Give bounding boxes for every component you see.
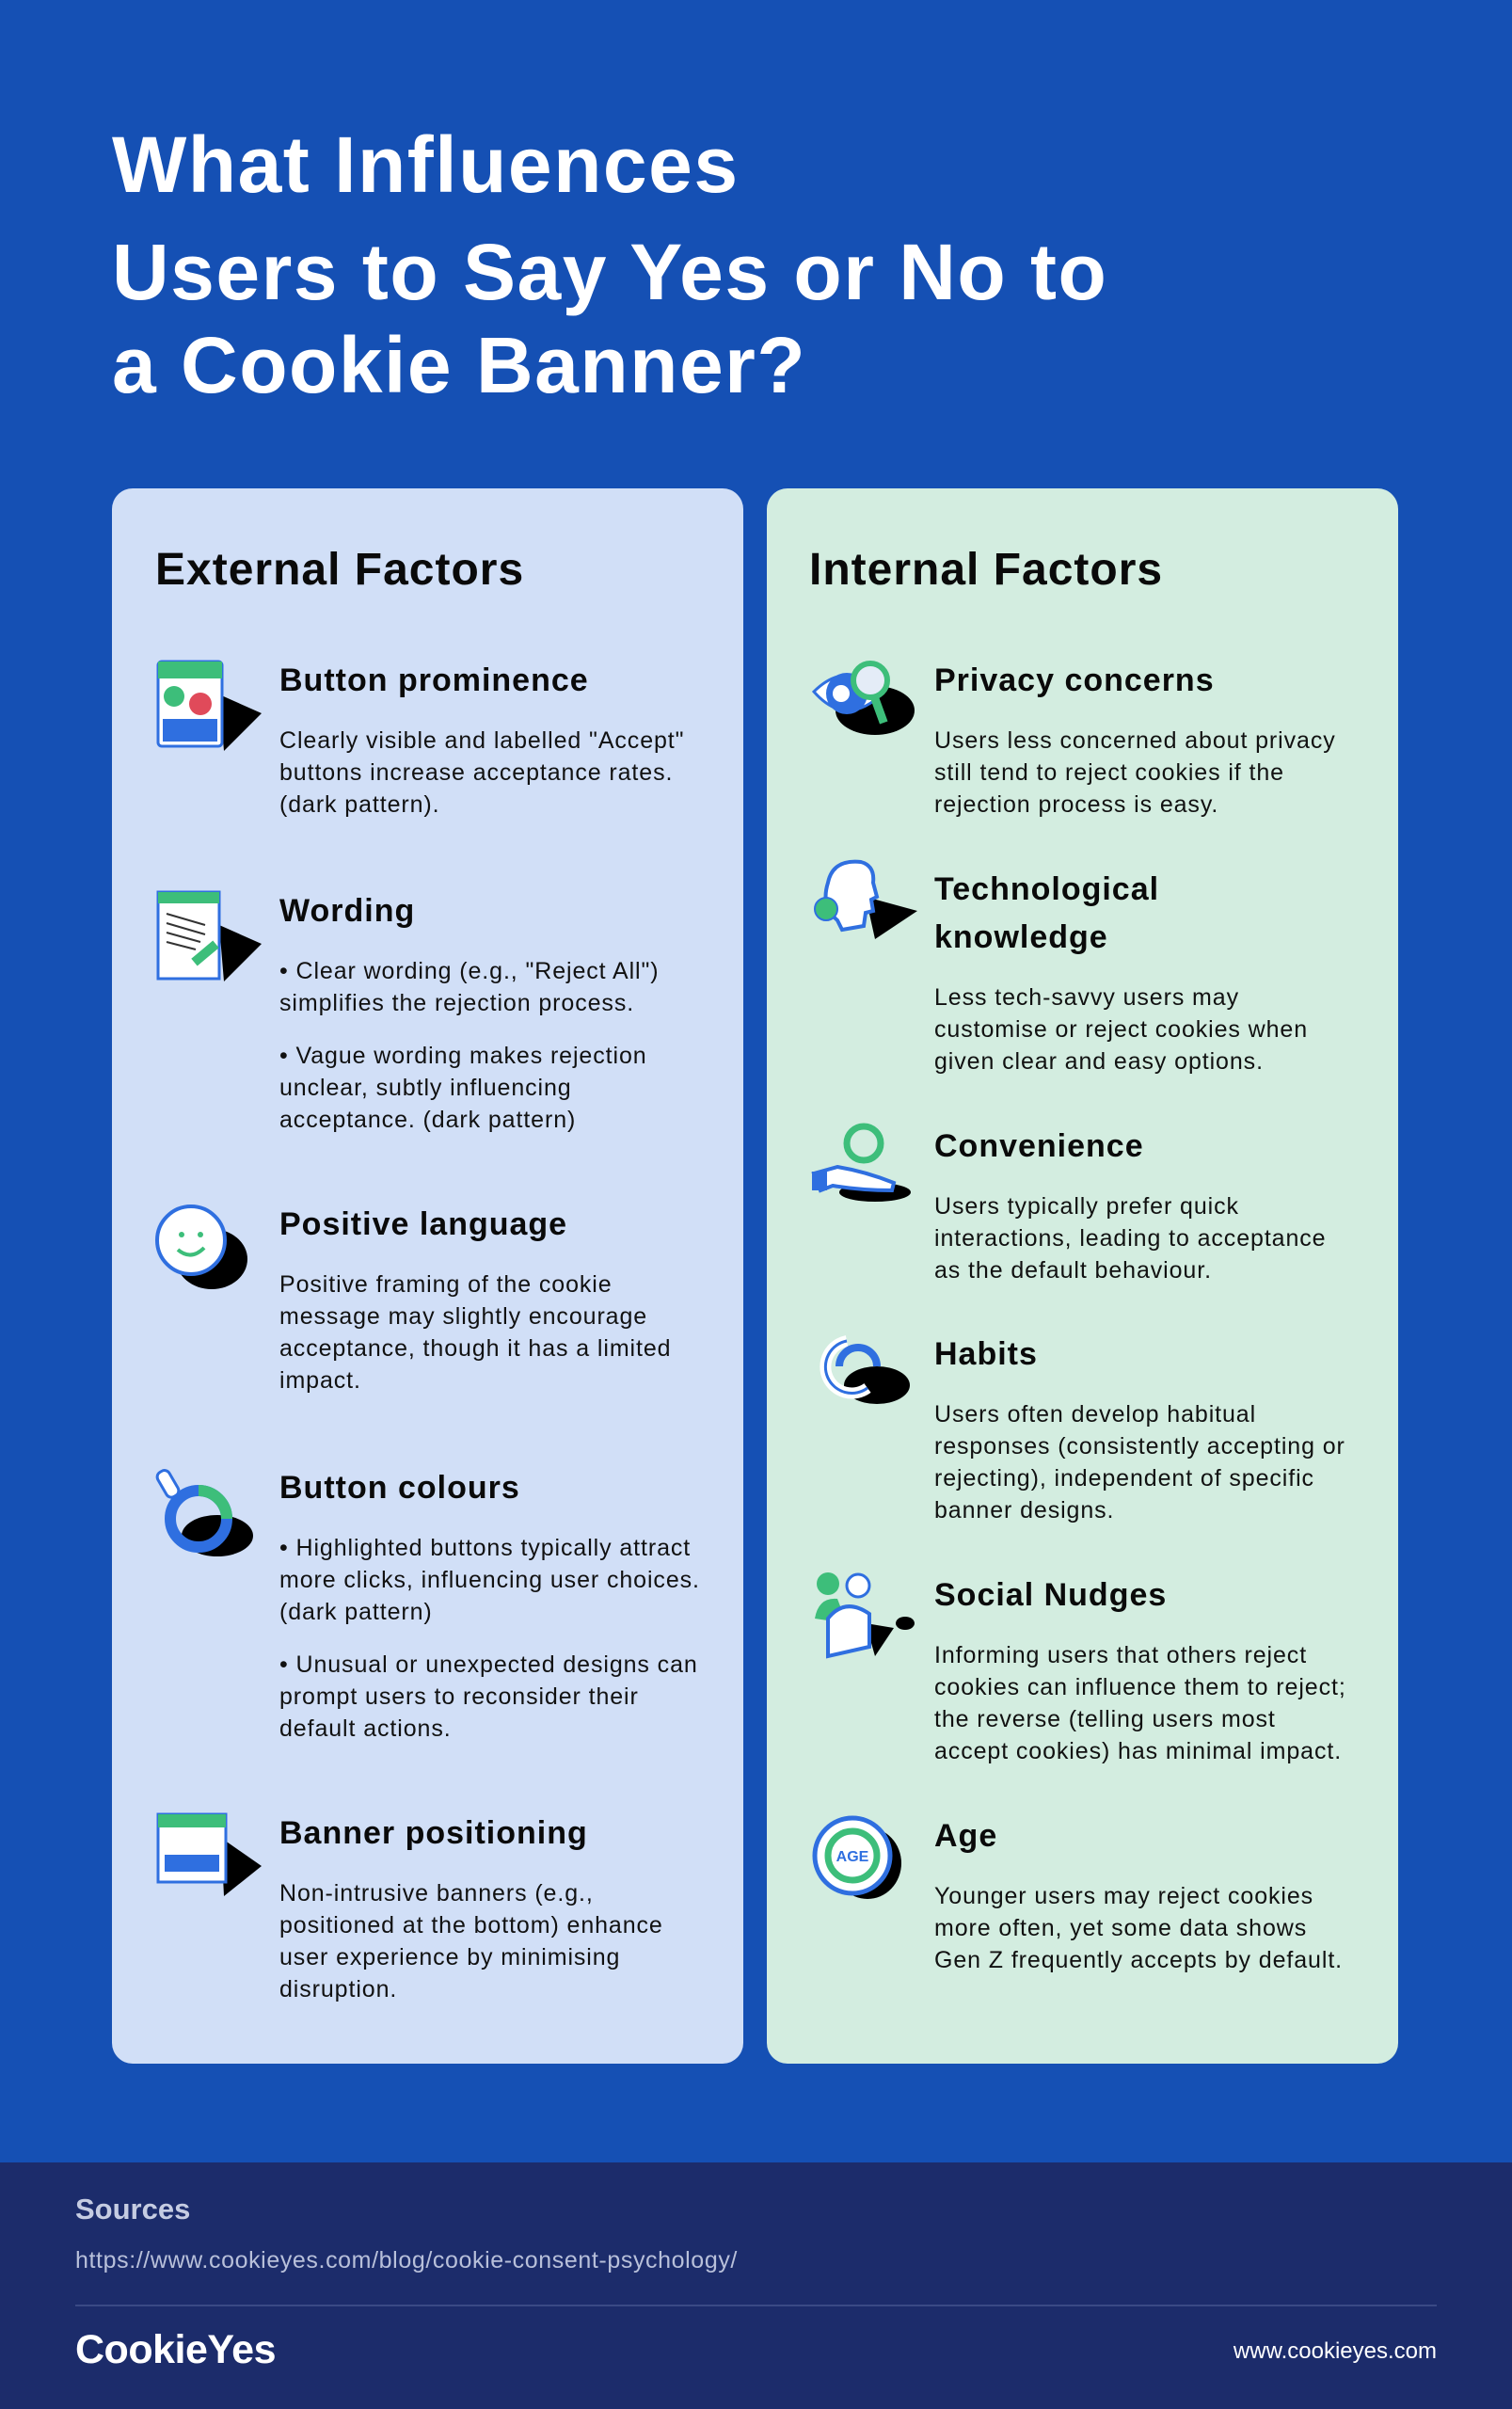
item: positive language: impact. xyxy=(279,1367,361,1394)
item: wording xyxy=(279,893,659,1133)
item: social nudges: cookies can influence them to reject; xyxy=(934,1674,1346,1700)
item: button colours xyxy=(279,1470,700,1742)
website: www.cookieyes.com xyxy=(1233,2338,1437,2364)
icon: banner positioning xyxy=(156,1812,262,1896)
item: habits: Habits xyxy=(934,1336,1038,1372)
item: convenience: Users typically prefer quick xyxy=(934,1193,1239,1220)
icon: convenience xyxy=(811,1124,911,1202)
item: banner positioning: positioned at the bottom) enhance xyxy=(279,1912,663,1938)
item: button prominence: Clearly visible and labelled "Accept" xyxy=(279,727,684,754)
item: wording: acceptance. (dark pattern) xyxy=(279,1107,576,1133)
item: habits: banner designs. xyxy=(934,1497,1114,1524)
item: button colours: default actions. xyxy=(279,1715,452,1742)
item: positive language xyxy=(279,1206,671,1394)
icon: wording xyxy=(156,890,262,981)
item: convenience: Convenience xyxy=(934,1128,1144,1164)
icon: age: AGE xyxy=(836,1849,869,1865)
icon: positive language xyxy=(155,1204,247,1289)
item: button prominence: Button prominence xyxy=(279,662,589,698)
item: age: Gen Z frequently accepts by default. xyxy=(934,1947,1343,1973)
item: wording: unclear, subtly influencing xyxy=(279,1075,572,1101)
panel: internal factors xyxy=(767,488,1398,2064)
item: button prominence: buttons increase acceptance rates. xyxy=(279,759,673,786)
item: button prominence xyxy=(279,662,684,818)
item: social nudges xyxy=(934,1577,1346,1764)
icon: technological knowledge xyxy=(814,860,917,939)
item: positive language: acceptance, though it has a limited xyxy=(279,1335,671,1362)
item: button colours: Button colours xyxy=(279,1470,520,1506)
item: technological knowledge xyxy=(934,871,1308,1075)
item: social nudges: the reverse (telling users most xyxy=(934,1706,1276,1732)
item: button colours: • Unusual or unexpected designs can xyxy=(279,1651,698,1678)
item: positive language: Positive language xyxy=(279,1206,567,1242)
panel: external factors xyxy=(112,488,743,2064)
item: banner positioning: disruption. xyxy=(279,1976,397,2002)
item: technological knowledge: given clear and easy options. xyxy=(934,1048,1264,1075)
heading: internal factors: Internal Factors xyxy=(809,545,1163,595)
item: technological knowledge: Technological xyxy=(934,871,1159,907)
icon: social nudges xyxy=(815,1572,915,1658)
icon: button colours xyxy=(156,1469,253,1556)
item: wording: simplifies the rejection process. xyxy=(279,990,634,1016)
item: privacy concerns: Privacy concerns xyxy=(934,662,1215,698)
item: wording: • Vague wording makes rejection xyxy=(279,1043,647,1069)
item: wording: • Clear wording (e.g., "Reject All") xyxy=(279,958,659,984)
item: convenience: interactions, leading to acceptance xyxy=(934,1225,1326,1252)
item: technological knowledge: customise or reject cookies when xyxy=(934,1016,1308,1043)
title: a Cookie Banner? xyxy=(112,321,806,409)
item: positive language: Positive framing of the cookie xyxy=(279,1271,613,1298)
item: habits xyxy=(934,1336,1345,1524)
item: habits: rejecting), independent of specific xyxy=(934,1465,1314,1492)
icon: privacy concerns xyxy=(812,661,915,735)
heading: external factors: External Factors xyxy=(155,545,524,595)
item: social nudges: Social Nudges xyxy=(934,1577,1167,1613)
item: privacy concerns: still tend to reject cookies if the xyxy=(934,759,1284,786)
title: What Influences xyxy=(112,120,740,209)
item: habits: Users often develop habitual xyxy=(934,1401,1256,1428)
item: button colours: more clicks, influencing user choices. xyxy=(279,1567,700,1593)
icon: button prominence xyxy=(156,661,262,751)
item: convenience: as the default behaviour. xyxy=(934,1257,1212,1284)
footer xyxy=(0,2162,1512,2409)
item: age xyxy=(934,1818,1343,1973)
item: age: Younger users may reject cookies xyxy=(934,1883,1313,1909)
item: age: more often, yet some data shows xyxy=(934,1915,1307,1941)
item: banner positioning: Banner positioning xyxy=(279,1815,588,1851)
item: convenience xyxy=(934,1128,1326,1284)
item: button colours: • Highlighted buttons typically attract xyxy=(279,1535,691,1561)
item: social nudges: Informing users that others reject xyxy=(934,1642,1307,1668)
item: age: Age xyxy=(934,1818,997,1854)
item: privacy concerns: rejection process is easy. xyxy=(934,791,1218,818)
source url: https://www.cookieyes.com/blog/cookie-consent-psychology/ xyxy=(75,2247,738,2273)
item: banner positioning: user experience by minimising xyxy=(279,1944,620,1970)
item: social nudges: accept cookies) has minimal impact. xyxy=(934,1738,1342,1764)
item: technological knowledge: Less tech-savvy users may xyxy=(934,984,1239,1011)
logo: CookieYes xyxy=(75,2327,276,2372)
icon: habits xyxy=(820,1335,910,1404)
item: banner positioning: Non-intrusive banners (e.g., xyxy=(279,1880,594,1906)
icon: age xyxy=(813,1816,901,1899)
title: Users to Say Yes or No to xyxy=(112,228,1107,316)
item: privacy concerns: Users less concerned about privacy xyxy=(934,727,1336,754)
sources heading: Sources xyxy=(75,2193,190,2226)
item: technological knowledge: knowledge xyxy=(934,919,1108,955)
item: button colours: prompt users to reconsider their xyxy=(279,1683,639,1710)
item: button prominence: (dark pattern). xyxy=(279,791,440,818)
item: habits: responses (consistently accepting or xyxy=(934,1433,1345,1460)
item: banner positioning xyxy=(279,1815,663,2002)
item: button colours: (dark pattern) xyxy=(279,1599,433,1625)
item: positive language: message may slightly encourage xyxy=(279,1303,647,1330)
item: privacy concerns xyxy=(934,662,1336,818)
title xyxy=(112,120,1107,409)
item: wording: Wording xyxy=(279,893,415,929)
